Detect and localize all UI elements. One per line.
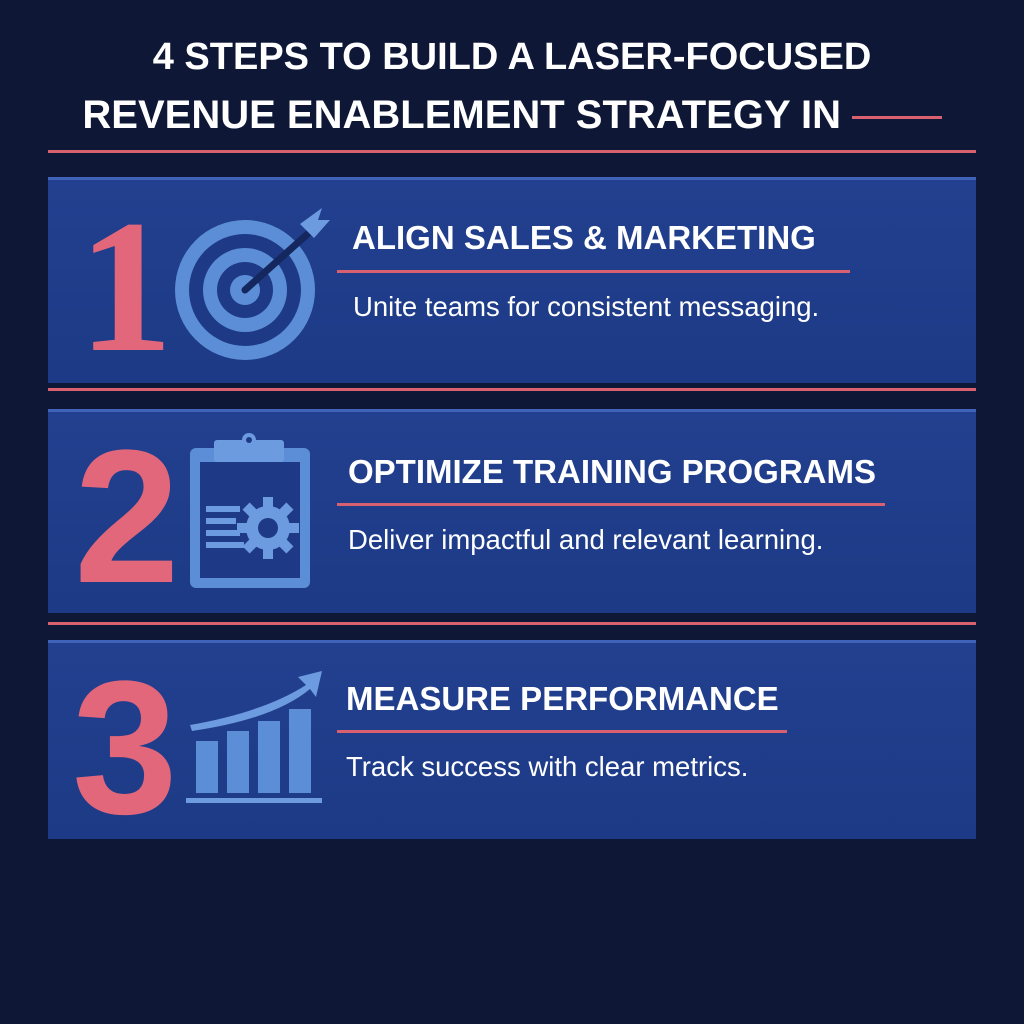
heading 2: OPTIMIZE TRAINING PROGRAMS	[348, 453, 876, 490]
title: 4 STEPS TO BUILD A LASER-FOCUSED	[153, 36, 871, 78]
number 1: 1	[78, 182, 173, 392]
heading 3: MEASURE PERFORMANCE	[346, 680, 779, 717]
heading 1: ALIGN SALES & MARKETING	[352, 219, 816, 256]
text 3: Track success with clear metrics.	[346, 751, 748, 782]
text 1: Unite teams for consistent messaging.	[353, 291, 819, 322]
panel: step 3	[48, 640, 976, 839]
title	[82, 36, 942, 137]
panel: step 2	[48, 409, 976, 613]
title: REVENUE ENABLEMENT STRATEGY IN	[82, 93, 841, 137]
icon: bar chart arrow	[186, 671, 322, 803]
number 2: 2	[74, 411, 180, 623]
text 2: Deliver impactful and relevant learning.	[348, 524, 823, 555]
number 3: 3	[72, 642, 178, 854]
icon: target	[175, 208, 330, 360]
panel: step 1	[48, 177, 976, 383]
icon: clipboard gear	[190, 433, 310, 588]
